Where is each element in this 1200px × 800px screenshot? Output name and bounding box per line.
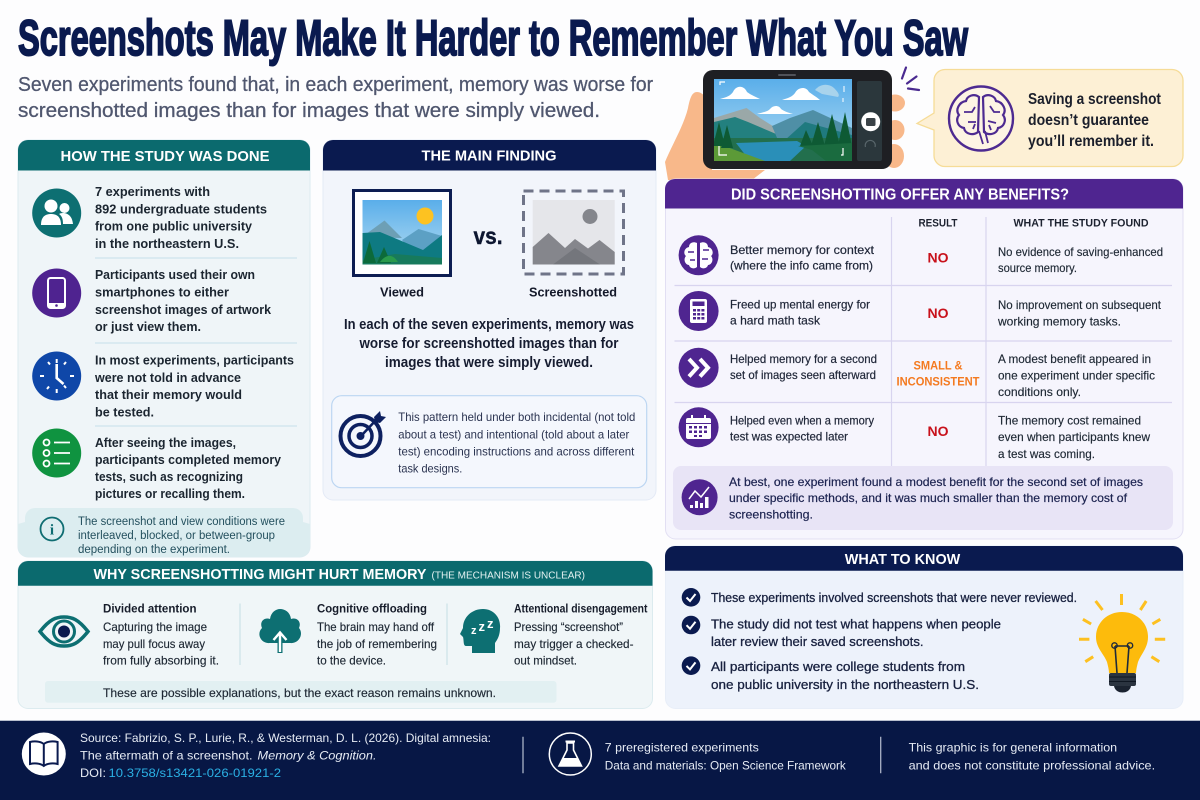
icon: sleeping head: z [471,625,477,637]
icon: people [32,188,81,238]
text: memory tests: participants completed memory [95,452,282,467]
row: second set of images: SMALL & [914,358,963,372]
main finding text: worse for screenshotted images than for [359,336,619,352]
icon: sleeping head: z [487,616,494,631]
icon: checklist [32,428,81,478]
callout: pattern: test) encoding instructions and across different [398,444,635,458]
row: mental energy: Freed up mental energy for [730,298,870,312]
main finding text [344,317,634,371]
note: conditions [18,508,310,557]
note: conditions: i [50,522,54,538]
row: test expected: even when participants knew [998,430,1150,444]
cause: attentional disengagement: Attentional disengagement [514,602,648,616]
illustration: hand holding phone [665,68,919,180]
disclaimer: This graphic is for general information [909,740,1117,754]
note: conditions: interleaved, blocked, or between-group [78,530,275,542]
heading: THE MAIN FINDING [422,148,556,164]
cause: cognitive offloading: The brain may hand off [317,620,435,634]
heading: DID SCREENSHOTTING OFFER ANY BENEFITS? [731,186,1069,204]
viewed image [354,190,450,276]
row: second set of images: INCONSISTENT [896,374,980,388]
icon: light bulb [1079,594,1165,692]
row: context memory [679,235,1163,275]
vs label: vs. [474,223,502,249]
disclaimer: and does not constitute professional advice. [909,758,1155,772]
cause: attentional disengagement: Pressing “screenshot” [514,620,623,634]
cause: divided attention [103,602,219,668]
panel: the main finding [323,140,656,500]
cause: cognitive offloading: the job of remembering [317,637,437,651]
footer [0,720,1200,800]
callout text: doesn’t guarantee [1028,112,1149,129]
subtitle: screenshotted images than for images that were simply viewed. [18,100,600,122]
icon: target [340,411,386,456]
summary callout [673,466,1173,530]
row: test expected: test was expected later [730,430,848,444]
source citation: 10.3758/s13421-026-01921-2 [108,766,281,780]
source citation: The aftermath of a screenshot. [80,748,252,762]
source citation: Memory & Cognition. [258,748,376,762]
summary callout: At best, one experiment found a modest benefit for the second set of images [729,475,1143,489]
row: mental energy: No improvement on subsequent [998,298,1162,312]
text: memory tests [95,435,282,501]
text: not told: that their memory would [95,387,242,402]
note: conditions: The screenshot and view conditions were [78,516,285,528]
cause: divided attention: from fully absorbing it. [103,654,219,668]
row: mental energy: NO [928,305,949,321]
main finding text: In each of the seven experiments, memory was [344,317,634,333]
column headers: WHAT THE STUDY FOUND [1014,218,1149,230]
row: test expected: The memory cost remained [998,414,1141,428]
callout: pattern: about a test) and intentional (told about a later [398,428,629,442]
disclaimer [909,740,1155,772]
cause: attentional disengagement: may trigger a checked- [514,637,634,651]
text: experiments: in the northeastern U.S. [95,236,239,251]
icon: open book [22,732,66,776]
icon: flask [549,733,591,775]
row: context memory: NO [928,250,949,266]
item: did not test review: The study did not test what happens when people [711,616,1001,632]
text: memory tests: After seeing the images, [95,435,236,450]
text: experiments: 7 experiments with [95,184,210,199]
shutter sparks [902,68,919,90]
subtitle: Seven experiments found that, in each experiment, memory was worse for [18,74,653,96]
phone body [703,70,892,169]
icon: clock [32,352,81,400]
text: smartphones: or just view them. [95,319,201,334]
text: experiments: from one public university [95,218,253,234]
row: test expected: NO [928,423,949,439]
note: conditions: depending on the experiment. [78,544,230,556]
cause: cognitive offloading: Cognitive offloading [317,602,427,616]
panel: why screenshotting might hurt memory [18,561,652,708]
row: test expected: Helped even when a memory [730,414,874,428]
text: smartphones: smartphones to either [95,284,229,300]
callout: pattern: task designs. [398,462,462,476]
text: smartphones: Participants used their own [95,267,255,282]
column headers: RESULT [918,218,958,230]
preregistration note: Data and materials: Open Science Framework [605,758,847,772]
heading [323,140,656,170]
icon: eye [40,617,88,646]
icon: brain [679,235,719,275]
text: smartphones: screenshot images of artwork [95,302,272,317]
icon: sleeping head: z [478,619,486,634]
icon: double chevron [679,348,719,388]
item: college students: one public university in the northeastern U.S. [711,677,979,692]
label: screenshotted: Screenshotted [529,284,617,300]
note: possible explanations: These are possible explanations, but the exact reason remains unknown. [103,686,496,700]
hand [665,92,765,180]
phone screen landscape [713,79,852,161]
panel: how the study was done [18,140,310,557]
heading: WHAT TO KNOW [845,551,961,568]
row: test expected [679,407,1150,461]
text: not told [94,352,294,420]
item: did not test review: later review their saved screenshots. [711,634,924,649]
row: mental energy: a hard math task [730,314,821,328]
item: college students [682,656,979,692]
icon: sleeping head [460,609,500,653]
source citation: Source: Fabrizio, S. P., Lurie, R., & Westerman, D. L. (2026). Digital amnesia: [80,731,491,745]
heading [18,140,310,170]
row: second set of images: set of images seen afterward [730,368,876,382]
text: memory tests: tests, such as recognizing [95,469,243,484]
heading [18,561,652,586]
callout text [1028,91,1161,150]
row: second set of images [679,348,1155,399]
text: not told: be tested. [95,404,154,420]
icon: chart [682,479,718,515]
column headers [918,218,1149,230]
icon: calendar [679,407,719,447]
text: experiments: 892 undergraduate students [95,202,267,216]
cause: divided attention: Divided attention [103,602,196,616]
heading: WHY SCREENSHOTTING MIGHT HURT MEMORY [94,567,427,583]
text: experiments [95,184,267,251]
heading: (THE MECHANISM IS UNCLEAR) [432,570,585,582]
cause: attentional disengagement: out mindset. [514,654,577,668]
icon: smartphone [32,268,81,318]
icon: brain [949,86,1013,150]
row: test expected: a test was coming. [998,447,1095,461]
cause: cognitive offloading [317,602,437,668]
preregistration note: 7 preregistered experiments [605,740,759,754]
row: second set of images: conditions only. [998,385,1081,399]
row: context memory: (where the info came from) [730,258,873,272]
preregistration note [605,740,847,772]
heading [665,179,1183,208]
text: not told: were not told in advance [94,370,241,385]
row: context memory: No evidence of saving-enhanced [998,245,1163,259]
row: second set of images: Helped memory for a second [730,352,877,366]
icon: calculator [679,291,719,331]
icon: cloud upload [259,609,301,653]
row: context memory: Better memory for context [730,243,875,257]
source citation: DOI: [80,766,106,780]
callout text: Saving a screenshot [1028,91,1161,108]
text: not told: In most experiments, participants [95,352,294,368]
panel: did screenshotting offer any benefits [665,179,1183,539]
cause: divided attention: may pull focus away [103,637,205,651]
row: second set of images: one experiment under specific [998,368,1155,382]
item: did not test review [682,616,1001,649]
callout: pattern [332,396,647,488]
main finding text: images that were simply viewed. [385,355,593,371]
text: memory tests: pictures or recalling them. [95,486,245,501]
cause: cognitive offloading: to the device. [317,654,386,668]
heading: HOW THE STUDY WAS DONE [60,148,270,165]
callout: saving a screenshot [917,70,1183,166]
row: second set of images: A modest benefit appeared in [998,352,1151,366]
callout text: you’ll remember it. [1028,133,1154,150]
cause: divided attention: Capturing the image [103,620,207,634]
heading [665,546,1183,571]
panel: what to know [665,546,1183,708]
callout: pattern: This pattern held under both incidental (not told [398,410,635,424]
row: mental energy [679,291,1162,331]
item: never reviewed: These experiments involved screenshots that were never reviewed. [711,590,1077,605]
source citation [80,731,491,780]
camera control panel [857,81,882,161]
cause: attentional disengagement [514,602,648,668]
row: mental energy: working memory tasks. [997,314,1121,328]
screenshotted image [524,191,624,274]
row: context memory: source memory. [998,261,1077,275]
summary callout: screenshotting. [729,508,813,522]
text: smartphones [95,267,272,334]
item: college students: All participants were college students from [711,659,965,674]
label: viewed: Viewed [380,284,424,300]
subtitle [18,74,653,122]
summary callout: under specific methods, and it was much smaller than the memory cost of [729,491,1128,505]
note: possible explanations [45,681,556,703]
